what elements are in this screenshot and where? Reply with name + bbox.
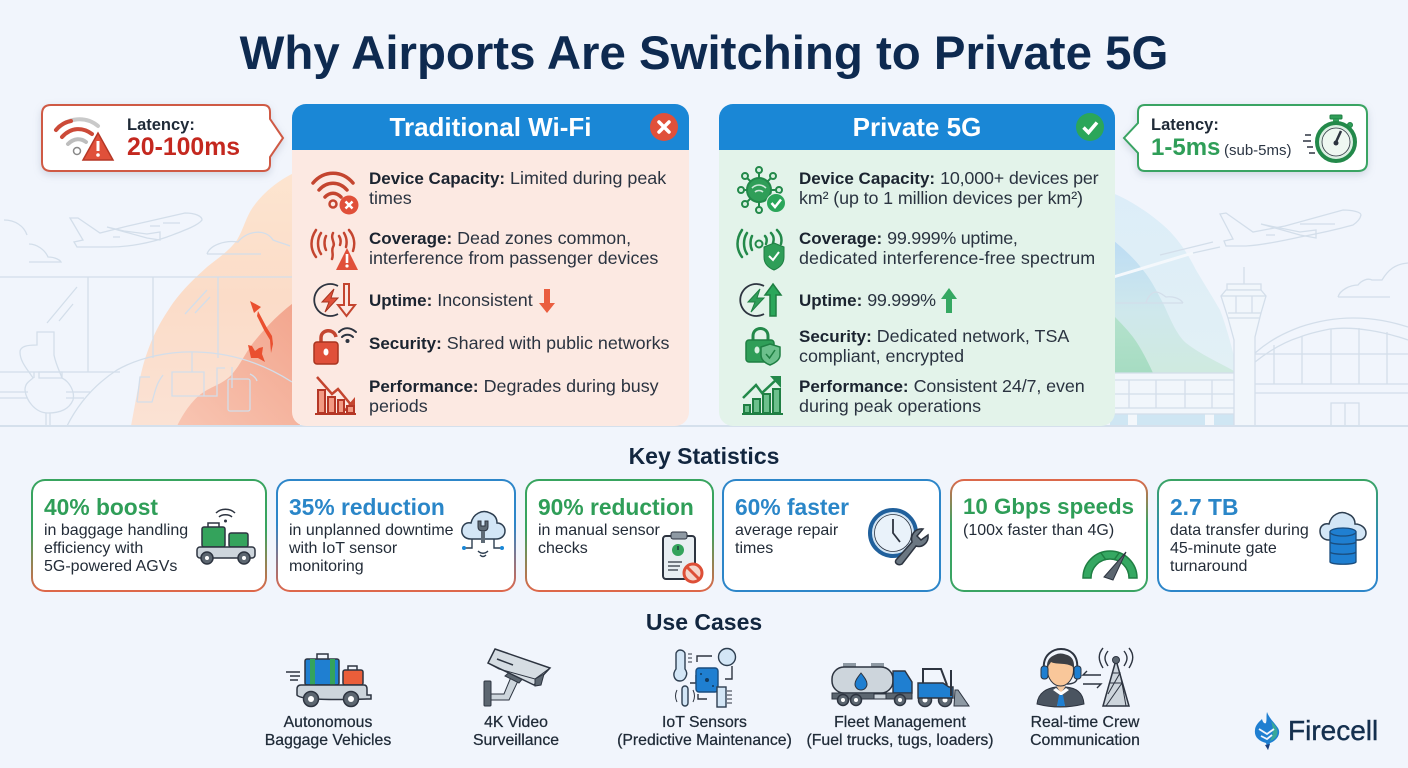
label: Baggage Vehicles [265, 732, 391, 749]
icon: Wi-Fi with X [311, 172, 358, 214]
row: security: Security: Dedicated network, TSA [799, 326, 1069, 346]
label: Autonomous [284, 714, 372, 731]
stat text: (100x faster than 4G) [963, 522, 1114, 539]
heading: use cases: Use Cases [646, 609, 762, 635]
stat text [44, 522, 188, 575]
title: Why Airports Are Switching to Private 5G [240, 27, 1168, 80]
stat text: monitoring [289, 558, 364, 575]
row: device capacity [799, 168, 1098, 208]
stat text: efficiency with [44, 540, 143, 557]
icon: interference warning [310, 228, 358, 270]
use case: real-time crew communication [1025, 648, 1145, 749]
stat text [538, 522, 660, 557]
icon: green check badge [1076, 113, 1104, 141]
label [262, 714, 394, 750]
icon: security camera [483, 649, 551, 707]
row: security: Security: Shared with public networks [369, 333, 669, 353]
icon: weak Wi-Fi warning [54, 117, 114, 161]
row: coverage [799, 228, 1095, 268]
label: Communication [1030, 732, 1140, 749]
stat text: data transfer during [1170, 522, 1309, 539]
stat text: 5G-powered AGVs [44, 558, 177, 575]
stat card: manual sensor checks [525, 479, 714, 592]
icon: cloud with wrench [461, 510, 506, 558]
logo wordmark: Firecell [1288, 715, 1378, 746]
latency value: 20-100ms [127, 134, 240, 161]
stat card: unplanned downtime [276, 479, 516, 592]
icon: speed gauge [1082, 550, 1138, 581]
callout: 5G latency [1122, 104, 1370, 178]
use case: IoT sensors [612, 648, 797, 749]
icon: red down arrow [539, 289, 555, 313]
row: security: compliant, encrypted [799, 346, 964, 366]
row: coverage: dedicated interference-free spectrum [799, 248, 1095, 268]
label: 4K Video [484, 714, 548, 731]
use case: fleet management [802, 662, 998, 749]
row: device capacity: Device Capacity: Limited during peak [369, 168, 666, 188]
panel heading: Private 5G [853, 112, 981, 142]
stat card: baggage handling [31, 479, 267, 592]
label [456, 714, 576, 750]
row: performance [369, 376, 659, 416]
icon: fuel truck and loader [831, 663, 971, 708]
logo: Firecell [1254, 711, 1380, 751]
icon: bolt and down arrow [313, 283, 357, 318]
stat text: in baggage handling [44, 522, 188, 539]
stat text: checks [538, 540, 588, 557]
icon: crew member and radio tower [1036, 648, 1136, 708]
stat value: 35% reduction [289, 494, 445, 520]
icon: connected device network [737, 166, 785, 214]
use case: autonomous baggage vehicles [265, 653, 391, 749]
label [802, 714, 998, 750]
icon: open lock with Wi-Fi [313, 327, 357, 365]
stat text: times [735, 540, 773, 557]
panel: Private 5G [719, 104, 1115, 426]
icon: clock and wrench [868, 508, 929, 566]
label: Surveillance [473, 732, 559, 749]
label: (Fuel trucks, tugs, loaders) [806, 732, 994, 749]
row: device capacity: km² (up to 1 million devices per km²) [799, 188, 1083, 208]
icon: stopwatch [1303, 114, 1357, 163]
stat card: repair times [722, 479, 941, 592]
row: device capacity: Device Capacity: 10,000+ devices per [799, 168, 1098, 188]
panel heading: Traditional Wi-Fi [390, 112, 591, 142]
stat text [1170, 522, 1309, 575]
icon: rising chart [742, 376, 783, 415]
label: Real-time Crew [1031, 714, 1139, 731]
stat text: turnaround [1170, 558, 1247, 575]
icon: clipboard with prohibited sign [662, 532, 704, 584]
icon: coverage shield [736, 228, 784, 270]
stat text: 45-minute gate [1170, 540, 1277, 557]
heading: key statistics: Key Statistics [629, 443, 779, 469]
label [1025, 714, 1145, 750]
row: device capacity: times [369, 188, 412, 208]
row: coverage: Coverage: Dead zones common, [369, 228, 631, 248]
stat card: speeds [950, 479, 1148, 592]
icon: lock with shield [745, 327, 781, 366]
stat value: 10 Gbps speeds [963, 494, 1134, 519]
label [612, 714, 797, 750]
stat card: data transfer [1157, 479, 1378, 592]
label: (Predictive Maintenance) [617, 732, 792, 749]
row: security [799, 326, 1070, 366]
icon: bolt and up arrow [739, 282, 782, 317]
label: IoT Sensors [662, 714, 747, 731]
row: performance: periods [369, 396, 428, 416]
row: uptime: Uptime: Inconsistent [369, 290, 533, 310]
icon: baggage vehicle [286, 653, 372, 708]
row: performance: Performance: Degrades during busy [369, 376, 659, 396]
row: coverage: interference from passenger devices [369, 248, 658, 268]
icon: IoT sensors network [672, 648, 736, 708]
icon: green up arrow [941, 288, 957, 313]
stat text: in unplanned downtime [289, 522, 454, 539]
row: device capacity [369, 168, 666, 208]
label: Fleet Management [834, 714, 966, 731]
stat text [735, 522, 838, 557]
use case: 4K video surveillance [456, 649, 576, 749]
panel heading [292, 104, 689, 150]
row: performance [799, 376, 1085, 416]
stat text: with IoT sensor [289, 540, 397, 557]
row: performance: Performance: Consistent 24/7, even [799, 376, 1085, 396]
stat value: 2.7 TB [1170, 494, 1238, 520]
stat text [289, 522, 454, 575]
latency label: Latency: [1151, 116, 1219, 134]
row: coverage [369, 228, 658, 268]
stat value: 60% faster [735, 494, 849, 520]
icon: red X badge [650, 113, 678, 141]
row: performance: during peak operations [799, 396, 981, 416]
panel heading [719, 104, 1115, 150]
callout: Wi-Fi latency [38, 104, 285, 178]
stat text: in manual sensor [538, 522, 660, 539]
stat value: 90% reduction [538, 494, 694, 520]
icon: baggage cart with Wi-Fi [196, 508, 256, 565]
stat text: average repair [735, 522, 838, 539]
icon: cloud database [1319, 512, 1367, 565]
panel: Traditional Wi-Fi [292, 104, 689, 426]
row: coverage: Coverage: 99.999% uptime, [799, 228, 1018, 248]
latency value: 1-5ms [1151, 134, 1220, 161]
stat value: 40% boost [44, 494, 158, 520]
icon: Firecell flame [1254, 711, 1281, 751]
icon: falling chart [315, 376, 356, 415]
row: uptime: Uptime: 99.999% [799, 290, 936, 310]
latency label: Latency: [127, 116, 195, 134]
latency note: (sub-5ms) [1224, 142, 1292, 159]
